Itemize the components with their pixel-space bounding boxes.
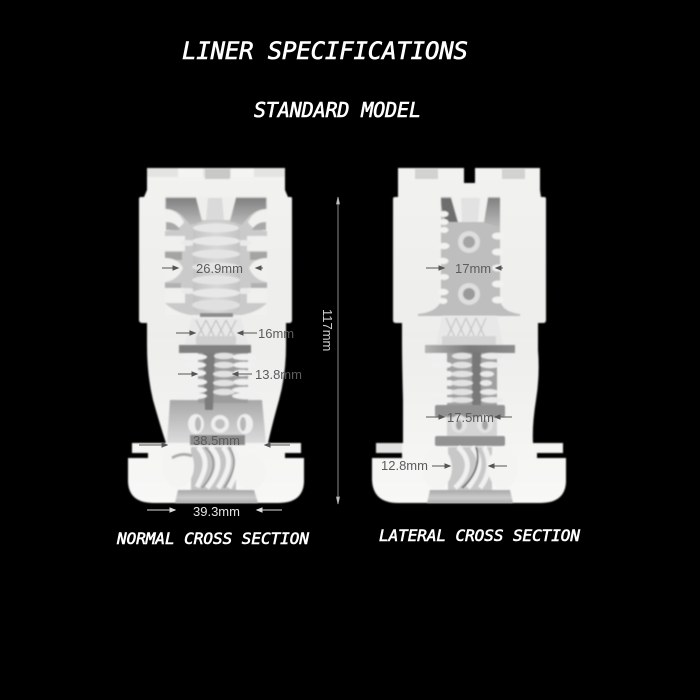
label 12.8mm: 12.8mm: [381, 458, 428, 473]
subtitle: STANDARD MODEL: [254, 98, 421, 122]
lower cavity with ribs: [167, 345, 266, 445]
overall height dimension: [320, 197, 340, 504]
caption: lateral cross section: LATERAL CROSS SECTION: [379, 526, 580, 545]
dimension labels: normal section: [139, 261, 302, 519]
waist mesh: [184, 318, 249, 345]
label 13.8mm: 13.8mm: [255, 367, 302, 382]
label 17.5mm: 17.5mm: [447, 410, 494, 425]
measurement arrows: normal section: [139, 266, 290, 512]
twisted lower channel: lateral: [422, 447, 518, 503]
normal cross section diagram: [128, 168, 304, 519]
upper cavity: lateral: [418, 197, 520, 316]
measurement arrows: lateral section: [426, 266, 512, 468]
height line with arrowheads: [336, 197, 340, 504]
label 16mm: 16mm: [258, 326, 294, 341]
liner body: lateral section: [372, 168, 566, 503]
lower cavity with ribs: lateral: [425, 345, 515, 446]
twisted lower channel: [162, 444, 266, 503]
dimension labels: lateral section: [381, 261, 512, 473]
label 17mm: 17mm: [455, 261, 491, 276]
upper cavity: [165, 197, 267, 317]
label 26.9mm: 26.9mm: [196, 261, 243, 276]
lateral cross section diagram: [372, 168, 566, 503]
label 38.5mm: 38.5mm: [193, 433, 240, 448]
label 39.3mm: 39.3mm: [193, 504, 240, 519]
title: LINER SPECIFICATIONS: [182, 37, 468, 65]
liner body: normal section: [128, 168, 304, 503]
waist mesh: lateral: [436, 316, 503, 345]
caption: normal cross section: NORMAL CROSS SECTION: [116, 529, 309, 548]
label 117mm: 117mm: [320, 309, 335, 351]
